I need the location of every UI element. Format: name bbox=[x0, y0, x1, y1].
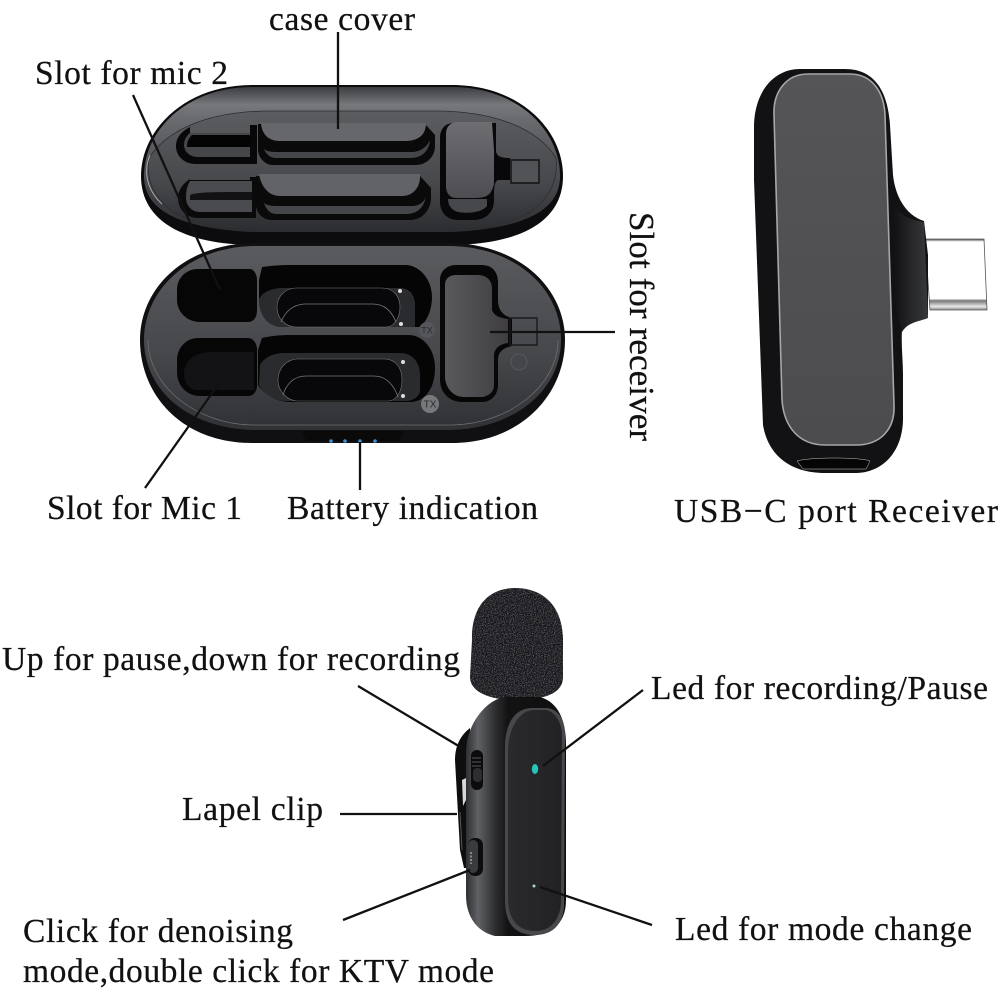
tray well: mic 2 bbox=[277, 288, 400, 327]
tray well: mic 1 bbox=[278, 359, 402, 401]
tray contacts: mic 2 bbox=[398, 289, 403, 326]
tray label RX bbox=[511, 354, 527, 370]
label: up for pause, down for recording: Up for pause,down for recording bbox=[2, 641, 460, 678]
USB-C plug bbox=[925, 239, 987, 310]
lapel clip bbox=[455, 728, 470, 868]
cover slot: mic 2 body bbox=[258, 124, 435, 165]
label: slot for mic 1 bbox=[47, 382, 242, 527]
microphone bbox=[455, 588, 566, 936]
mode LED bbox=[532, 884, 536, 888]
recording LED bbox=[532, 764, 538, 774]
label: USB-C port receiver: USB−C port Receiver bbox=[674, 493, 998, 530]
tray label TX 2: TX bbox=[424, 400, 437, 410]
label: battery indication: Battery indication bbox=[287, 490, 538, 527]
tray slot: mic 1 body bbox=[258, 335, 435, 402]
denoise button bbox=[468, 838, 483, 876]
tray contacts: mic 1 bbox=[401, 360, 405, 398]
label: click for denoising mode: Click for denoising bbox=[23, 913, 293, 950]
label: click for denoising mode bbox=[23, 870, 494, 990]
tray label TX bbox=[419, 322, 435, 338]
mic face bbox=[505, 708, 565, 935]
battery indicator strip bbox=[302, 431, 404, 441]
tray label TX: TX bbox=[421, 326, 433, 336]
label: up for pause, down for recording bbox=[2, 641, 462, 748]
pause record switch bbox=[471, 750, 483, 790]
cover slot: mic 2 head bbox=[176, 125, 257, 164]
tray slot: mic 1 bbox=[177, 338, 257, 396]
label: LED for mode change bbox=[540, 887, 972, 948]
tray slot: mic 2 bbox=[177, 269, 257, 322]
label: LED for recording or pause bbox=[543, 670, 988, 766]
receiver port bbox=[797, 458, 870, 469]
cover slot: receiver bbox=[440, 123, 510, 220]
receiver body bbox=[754, 69, 928, 473]
label: slot for mic 2 bbox=[35, 55, 228, 290]
case cover bbox=[141, 85, 563, 246]
tray slot: receiver bbox=[440, 265, 512, 402]
label: LED for mode change: Led for mode change bbox=[675, 911, 972, 948]
label: slot for mic 1: Slot for Mic 1 bbox=[47, 490, 242, 527]
receiver plate in tray bbox=[445, 275, 508, 397]
mic body bbox=[466, 697, 566, 936]
label: click for denoising mode: mode,double click for KTV mode bbox=[23, 953, 494, 990]
cover slot: mic 1 head bbox=[178, 177, 256, 218]
foam windscreen bbox=[470, 588, 563, 700]
tray slot: mic 2 body bbox=[259, 265, 432, 327]
label: slot for mic 2: Slot for mic 2 bbox=[35, 55, 228, 92]
battery LEDs bbox=[329, 439, 377, 443]
label: LED for recording or pause: Led for recording/Pause bbox=[651, 670, 988, 707]
label: lapel clip: Lapel clip bbox=[182, 791, 323, 828]
tray label TX 2 bbox=[421, 395, 439, 413]
charging case bbox=[140, 85, 565, 443]
cover slot: mic 1 body bbox=[256, 176, 431, 220]
label: slot for receiver: Slot for receiver bbox=[622, 212, 661, 441]
receiver face bbox=[774, 74, 894, 445]
receiver device bbox=[754, 69, 987, 473]
label: case cover: case cover bbox=[269, 1, 415, 38]
case tray bbox=[140, 243, 565, 443]
